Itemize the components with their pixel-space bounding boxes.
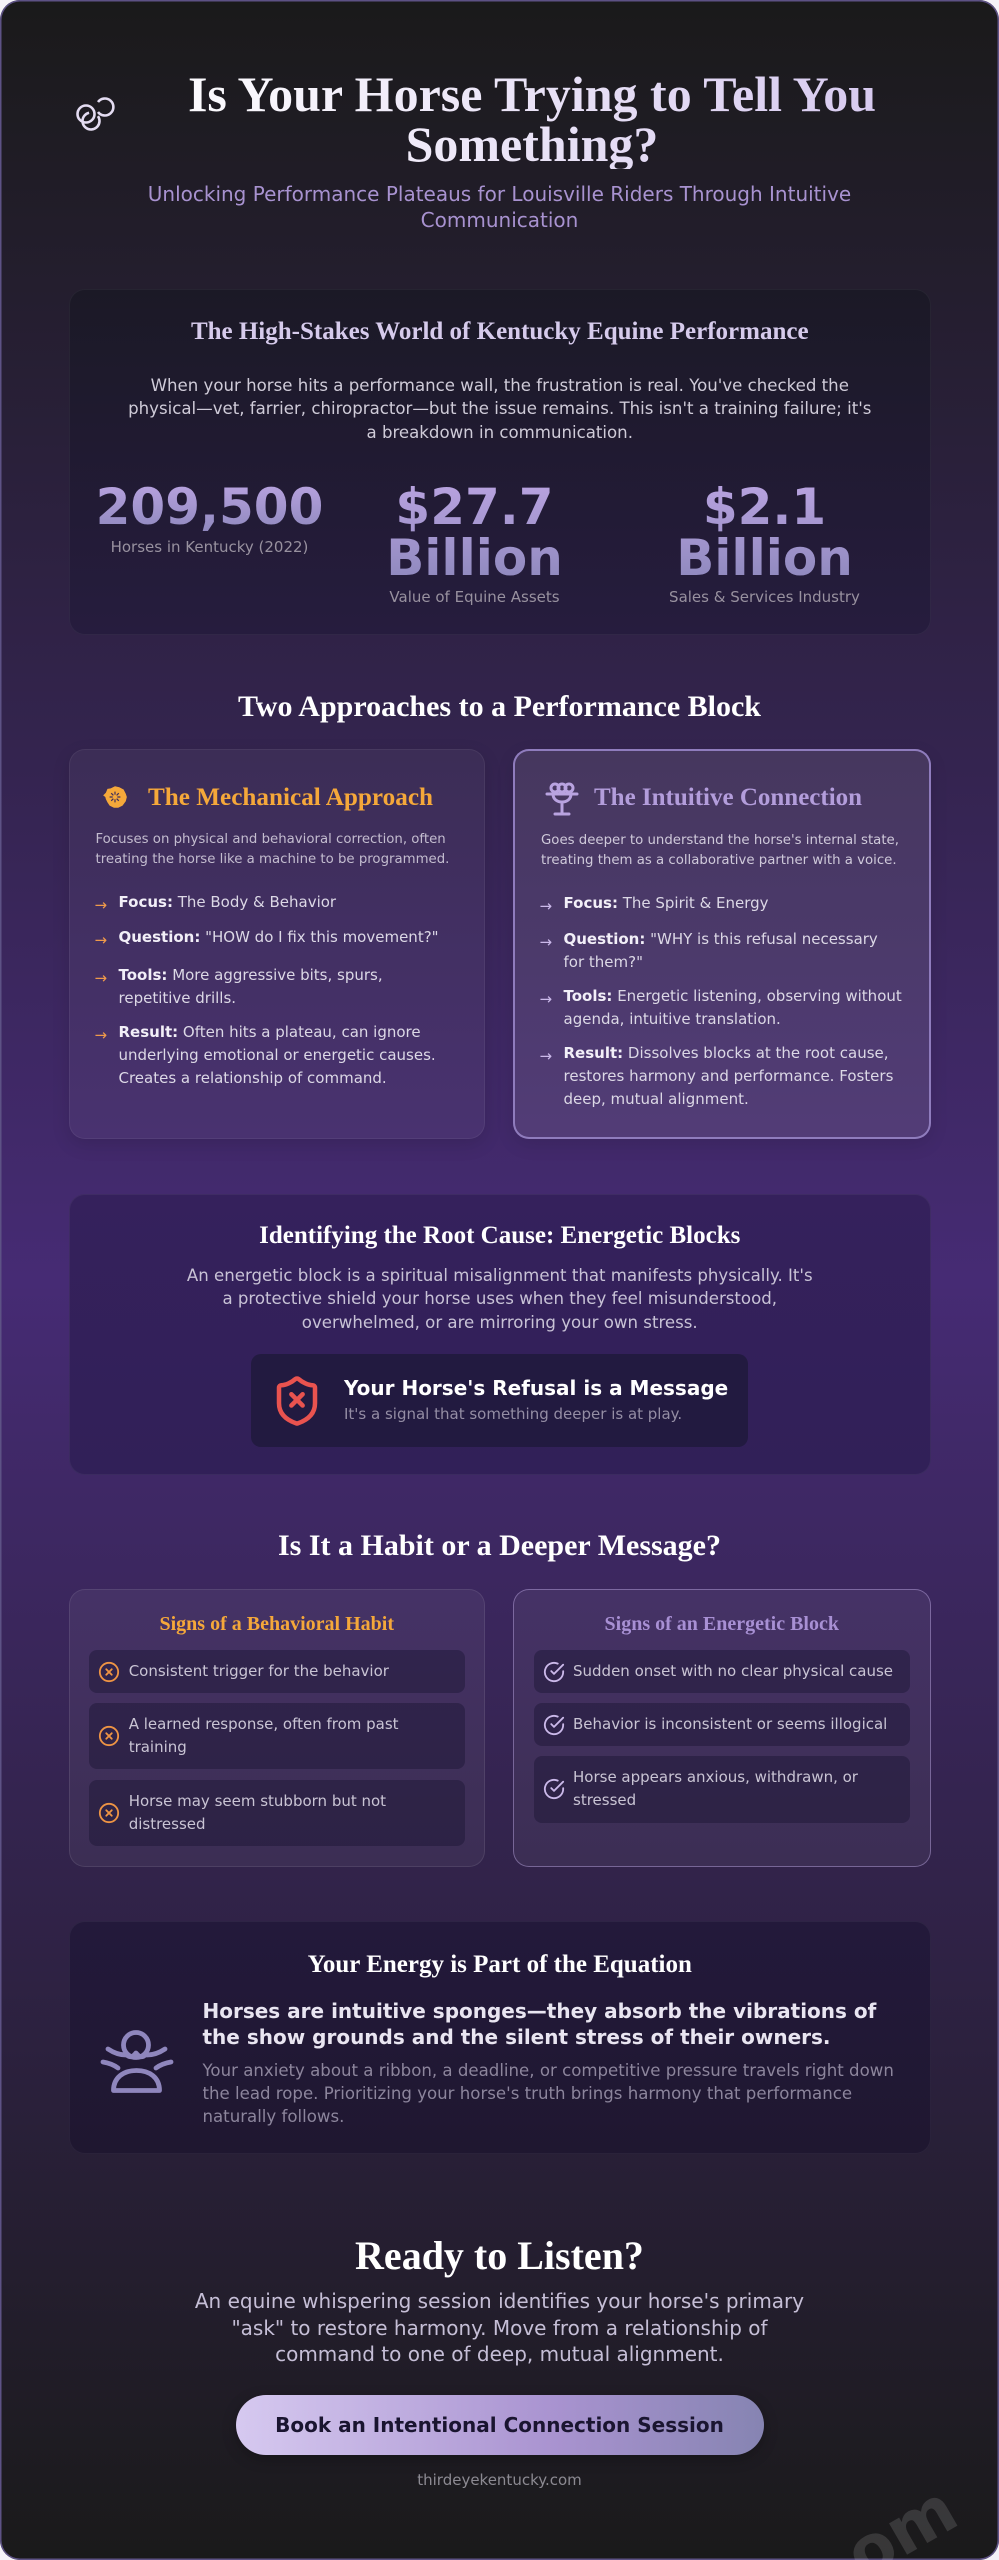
list item bbox=[534, 1703, 910, 1746]
result item: underlying emotional or energetic causes. bbox=[118, 1046, 436, 1064]
question item: for them?" bbox=[564, 952, 643, 970]
list item bbox=[89, 1703, 465, 1769]
list bbox=[94, 892, 439, 1086]
subtitle: Communication bbox=[421, 208, 578, 232]
focus item: Focus: The Spirit & Energy bbox=[564, 894, 769, 912]
title bbox=[132, 69, 932, 169]
panel: behavioral habit bbox=[68, 1589, 485, 1867]
cta text bbox=[195, 2289, 804, 2366]
panel: intuitive connection bbox=[513, 749, 930, 1139]
result item bbox=[94, 1022, 436, 1086]
stat: horses: 209,500 bbox=[96, 478, 323, 536]
cta button: Book an Intentional Connection Session bbox=[275, 2413, 724, 2437]
item text: Behavior is inconsistent or seems illogical bbox=[573, 1715, 887, 1733]
item text bbox=[573, 1768, 858, 1809]
question item: Question: "WHY is this refusal necessary bbox=[564, 930, 878, 948]
list: → bbox=[94, 931, 107, 949]
stat: sales and services bbox=[669, 478, 860, 606]
icon: x circle bbox=[98, 1802, 120, 1824]
item text: Consistent trigger for the behavior bbox=[129, 1662, 389, 1680]
list: → bbox=[94, 968, 107, 986]
icon: shield with x bbox=[276, 1376, 318, 1426]
card title: The Intuitive Connection bbox=[594, 784, 862, 811]
item text: training bbox=[129, 1738, 187, 1756]
item text bbox=[129, 1792, 386, 1833]
heading: The High-Stakes World of Kentucky Equine Performance bbox=[191, 318, 809, 344]
card title: Signs of a Behavioral Habit bbox=[160, 1613, 394, 1635]
title: Something? bbox=[406, 116, 658, 172]
description bbox=[96, 832, 449, 867]
website: thirdeyekentucky.com bbox=[417, 2471, 582, 2489]
result item: Result: Dissolves blocks at the root cause, bbox=[564, 1044, 889, 1062]
list bbox=[540, 894, 902, 1108]
card title: Signs of an Energetic Block bbox=[605, 1613, 839, 1635]
stat: equine assets: Billion bbox=[386, 528, 563, 586]
list: → bbox=[540, 1046, 552, 1064]
icon: gear bbox=[103, 786, 127, 808]
item text: A learned response, often from past bbox=[129, 1715, 399, 1733]
result item bbox=[540, 1044, 893, 1108]
cta heading: Ready to Listen? bbox=[355, 2233, 644, 2278]
result item: deep, mutual alignment. bbox=[564, 1090, 749, 1108]
description: treating them as a collaborative partner with a voice. bbox=[541, 853, 897, 868]
supporting text: naturally follows. bbox=[202, 2107, 344, 2126]
result item: Creates a relationship of command. bbox=[118, 1068, 387, 1086]
tools item bbox=[94, 966, 383, 1006]
list: → bbox=[540, 990, 552, 1008]
item text: stressed bbox=[573, 1791, 636, 1809]
icon: x circle bbox=[98, 1662, 120, 1682]
cta text: An equine whispering session identifies your horse's primary bbox=[195, 2289, 804, 2313]
list item bbox=[89, 1650, 465, 1693]
body text: overwhelmed, or are mirroring your own stress. bbox=[302, 1313, 698, 1332]
result item: restores harmony and performance. Fosters bbox=[564, 1066, 893, 1084]
cta text: "ask" to restore harmony. Move from a relationship of bbox=[231, 2316, 768, 2340]
cta text: command to one of deep, mutual alignment. bbox=[275, 2342, 724, 2366]
icon: rider bbox=[100, 2030, 174, 2093]
intro text: physical—vet, farrier, chiropractor—but the issue remains. This isn't a training failure; it's bbox=[128, 399, 871, 418]
question item: Question: "HOW do I fix this movement?" bbox=[118, 928, 439, 946]
question item bbox=[540, 930, 878, 970]
panel: high-stakes world bbox=[68, 289, 931, 635]
item text bbox=[128, 1715, 399, 1756]
list item bbox=[534, 1650, 910, 1693]
stat: sales and services: Billion bbox=[676, 528, 853, 586]
list: → bbox=[94, 896, 107, 914]
icon: chalice bbox=[546, 782, 578, 816]
focus item: Focus: The Body & Behavior bbox=[118, 892, 336, 910]
stat: sales and services: Sales & Services Industry bbox=[669, 588, 860, 606]
body text: a protective shield your horse uses when they feel misunderstood, bbox=[222, 1289, 777, 1308]
panel: root cause bbox=[68, 1194, 931, 1475]
description: Goes deeper to understand the horse's internal state, bbox=[541, 833, 899, 848]
panel: mechanical approach bbox=[68, 749, 485, 1139]
tools item bbox=[540, 986, 902, 1028]
heading: two approaches: Two Approaches to a Performance Block bbox=[238, 690, 761, 723]
panel: your energy bbox=[68, 1921, 931, 2154]
stat: equine assets: $27.7 bbox=[395, 478, 554, 536]
header bbox=[76, 66, 876, 232]
item text: Horse may seem stubborn but not bbox=[129, 1792, 386, 1810]
heading: Your Energy is Part of the Equation bbox=[308, 1950, 692, 1978]
list item bbox=[534, 1756, 910, 1823]
stat: horses: Horses in Kentucky (2022) bbox=[111, 538, 308, 556]
callout bbox=[251, 1354, 748, 1447]
stat: equine assets bbox=[386, 478, 563, 606]
heading: Identifying the Root Cause: Energetic Blocks bbox=[259, 1222, 740, 1249]
tools item: Tools: More aggressive bits, spurs, bbox=[118, 966, 383, 984]
description bbox=[541, 833, 899, 868]
tools item: agenda, intuitive translation. bbox=[564, 1010, 781, 1028]
body text bbox=[187, 1266, 813, 1332]
supporting text: Your anxiety about a ribbon, a deadline, or competitive pressure travels right down bbox=[202, 2060, 894, 2080]
heading: habit or message: Is It a Habit or a Deeper Message? bbox=[278, 1529, 721, 1562]
item text: distressed bbox=[129, 1815, 206, 1833]
list: → bbox=[540, 896, 552, 914]
tools item: repetitive drills. bbox=[118, 988, 236, 1006]
icon: check circle bbox=[544, 1714, 564, 1736]
call to action bbox=[195, 2233, 804, 2489]
supporting text: the lead rope. Prioritizing your horse's truth brings harmony that performance bbox=[202, 2084, 852, 2103]
tools item: Tools: Energetic listening, observing without bbox=[564, 986, 902, 1004]
callout subtitle: It's a signal that something deeper is at play. bbox=[344, 1405, 682, 1423]
result item: Result: Often hits a plateau, can ignore bbox=[118, 1022, 421, 1040]
body text: An energetic block is a spiritual misalignment that manifests physically. It's bbox=[187, 1266, 813, 1285]
item text: Horse appears anxious, withdrawn, or bbox=[573, 1768, 858, 1786]
panel: energetic block bbox=[513, 1589, 930, 1867]
stat: equine assets: Value of Equine Assets bbox=[389, 588, 560, 606]
icon: check circle bbox=[544, 1662, 564, 1682]
card title: The Mechanical Approach bbox=[148, 784, 433, 810]
intro text: When your horse hits a performance wall, the frustration is real. You've checked the bbox=[151, 376, 849, 394]
supporting text bbox=[202, 2060, 894, 2126]
list item bbox=[89, 1780, 465, 1846]
stat: sales and services: $2.1 bbox=[703, 478, 826, 536]
description: treating the horse like a machine to be programmed. bbox=[96, 852, 449, 867]
bold statement: the show grounds and the silent stress of their owners. bbox=[202, 2025, 831, 2049]
subtitle: Unlocking Performance Plateaus for Louisville Riders Through Intuitive bbox=[148, 182, 851, 206]
list: → bbox=[540, 932, 552, 950]
bold statement: Horses are intuitive sponges—they absorb the vibrations of bbox=[202, 1998, 876, 2022]
icon: linked rings bbox=[76, 97, 115, 131]
description: Focuses on physical and behavioral correction, often bbox=[96, 832, 446, 847]
callout title: Your Horse's Refusal is a Message bbox=[344, 1376, 728, 1400]
title: Is Your Horse Trying to Tell You bbox=[188, 66, 876, 122]
item text: Sudden onset with no clear physical cause bbox=[573, 1662, 893, 1680]
icon: x circle bbox=[98, 1726, 120, 1746]
subtitle bbox=[148, 182, 851, 232]
intro text: a breakdown in communication. bbox=[366, 422, 633, 442]
list: → bbox=[94, 1026, 107, 1044]
bold statement bbox=[202, 1998, 876, 2049]
cta button bbox=[236, 2395, 764, 2455]
icon: check circle bbox=[544, 1778, 564, 1800]
intro text bbox=[128, 376, 871, 442]
